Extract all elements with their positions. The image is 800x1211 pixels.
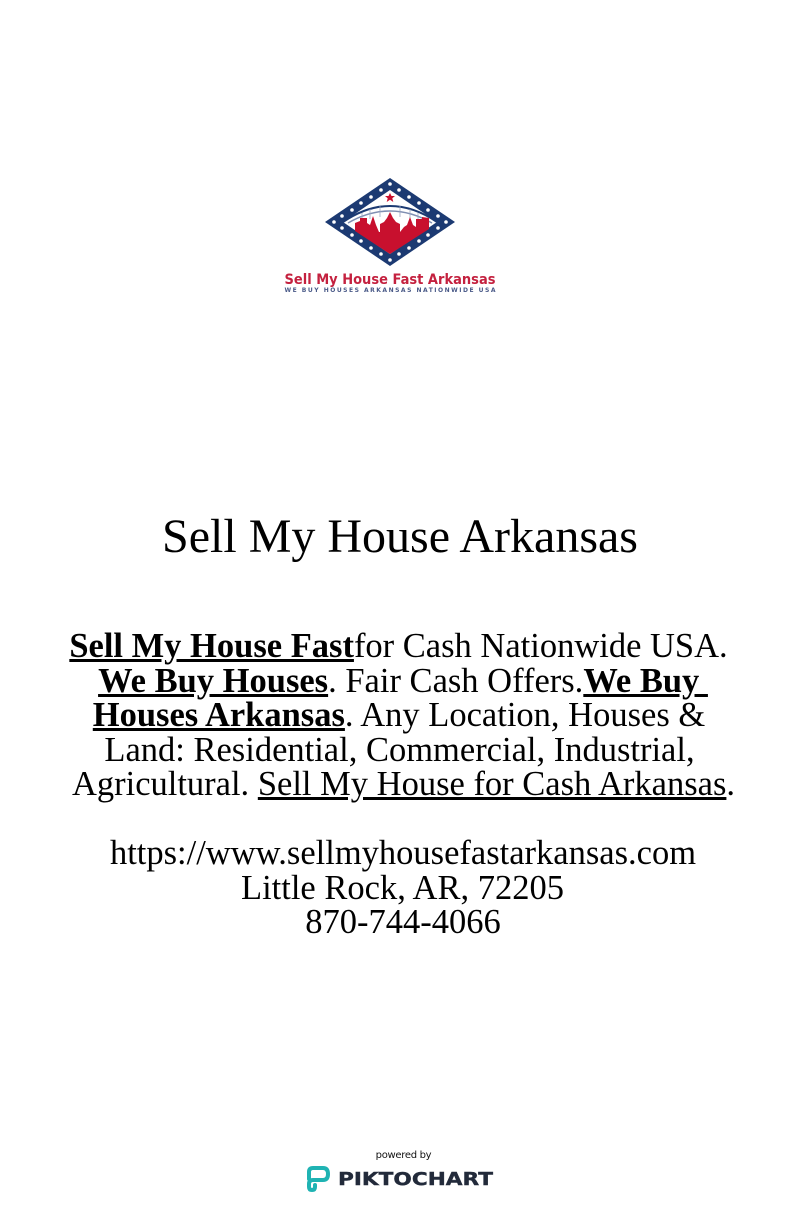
- contact details: https://www.sellmyhousefastarkansas.com: [110, 834, 696, 872]
- contact details: [110, 834, 696, 941]
- logo: [284, 178, 496, 294]
- icon: Piktochart logo: [307, 1166, 330, 1192]
- logo tagline: WE BUY HOUSES ARKANSAS NATIONWIDE USA: [284, 287, 496, 294]
- logo name: Sell My House Fast Arkansas: [284, 272, 496, 288]
- powered by label: powered by: [376, 1150, 431, 1161]
- title: Sell My House Arkansas: [162, 510, 638, 563]
- description text: [69, 627, 735, 803]
- contact details: Little Rock, AR, 72205: [241, 868, 564, 906]
- description text: We Buy Houses. Fair Cash Offers.We Buy: [98, 662, 699, 700]
- icon: Arkansas diamond emblem: [325, 178, 455, 266]
- description text: Houses Arkansas. Any Location, Houses &: [93, 696, 705, 734]
- description text: Land: Residential, Commercial, Industrial,: [104, 730, 695, 768]
- contact details: 870-744-4066: [305, 903, 501, 941]
- Piktochart wordmark: PIKTOCHART: [338, 1169, 494, 1190]
- description text: Sell My House Fastfor Cash Nationwide USA.: [69, 627, 728, 665]
- powered by footer: [307, 1150, 494, 1192]
- description text: Agricultural. Sell My House for Cash Arkansas.: [72, 765, 735, 803]
